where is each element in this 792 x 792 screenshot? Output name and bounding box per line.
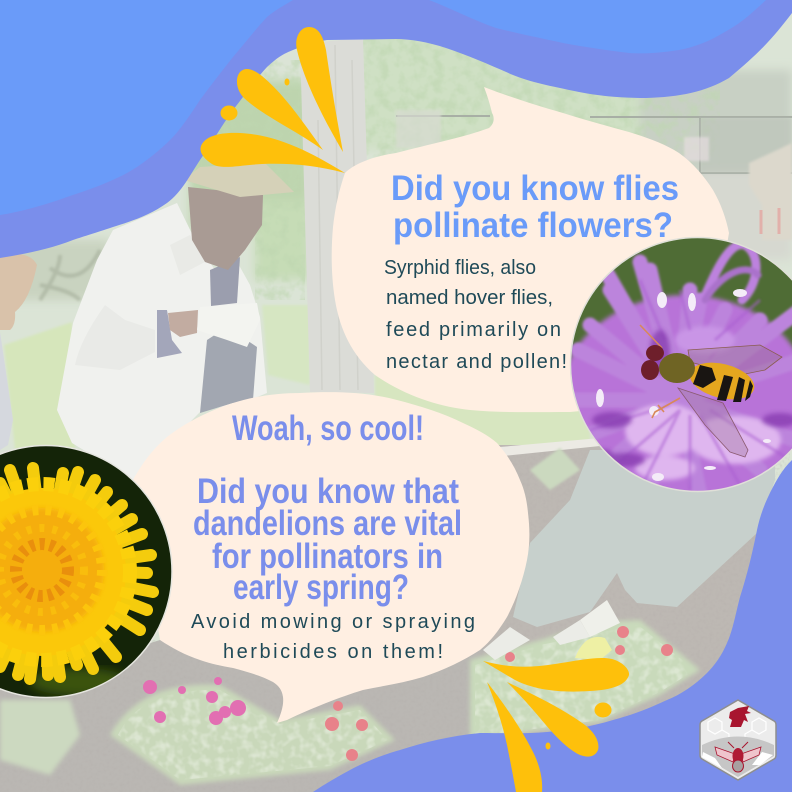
soil bed xyxy=(0,640,792,792)
photo circle: dandelion xyxy=(0,445,175,701)
body text: flies: feed primarily on xyxy=(386,319,561,341)
planting right xyxy=(470,620,700,740)
lattice xyxy=(396,110,441,148)
planting right texture xyxy=(475,625,695,737)
pink flowers xyxy=(143,677,246,725)
leaf texture xyxy=(190,30,720,300)
body text: dandelions: herbicides on them! xyxy=(223,641,443,663)
purple petals xyxy=(575,244,792,495)
heading: dandelions: dandelions are vital xyxy=(193,504,462,543)
wings xyxy=(688,345,782,375)
top light blue wave group xyxy=(0,0,792,258)
wooden post xyxy=(300,38,374,393)
thorax xyxy=(659,353,695,383)
red flowers xyxy=(325,626,673,761)
grass left xyxy=(4,322,75,450)
birdhouse xyxy=(749,143,792,240)
heading: dandelions: for pollinators in xyxy=(212,537,443,576)
inner golden petals xyxy=(0,488,126,656)
jacket xyxy=(57,203,267,480)
foliage behind fence xyxy=(0,30,792,300)
yellow splash top xyxy=(200,27,345,173)
honeycomb cells xyxy=(708,718,766,742)
body text: dandelions xyxy=(191,611,475,663)
dark periwinkle wave xyxy=(0,0,792,258)
planting left xyxy=(110,685,395,785)
body text: flies: named hover flies, xyxy=(386,287,553,309)
deep magenta shadows xyxy=(586,330,792,467)
dark fence panel xyxy=(700,118,792,173)
antenna and legs xyxy=(640,325,680,418)
heading: dandelions: early spring? xyxy=(233,568,409,607)
heading: flies: Did you know flies xyxy=(391,169,679,208)
abdomen stripes xyxy=(693,365,753,402)
face xyxy=(188,187,263,270)
body text: flies xyxy=(384,257,567,373)
bottom right blue wave xyxy=(313,460,792,792)
stone edging xyxy=(500,438,600,456)
pants xyxy=(513,450,775,627)
eyes xyxy=(641,345,664,380)
hat xyxy=(184,163,294,197)
grass middle xyxy=(262,305,310,385)
speech bubble: dandelions xyxy=(133,392,529,723)
yellow splash bottom xyxy=(483,658,629,792)
heading: flies xyxy=(391,169,679,245)
tree branches xyxy=(40,250,100,300)
bright flower centre xyxy=(625,326,781,480)
speech bubble: flies xyxy=(332,87,729,412)
shoe xyxy=(483,620,590,660)
lawn right xyxy=(375,375,590,450)
outer yellow petals xyxy=(0,468,153,679)
dark bag held xyxy=(200,327,257,413)
small plant on bed xyxy=(530,448,580,490)
floret rings xyxy=(0,484,130,660)
heading: dandelions xyxy=(193,409,462,607)
abdomen xyxy=(690,362,754,400)
body text: flies: Syrphid flies, also xyxy=(384,257,536,279)
yellow flowers xyxy=(575,637,612,660)
heading: dandelions: Did you know that xyxy=(197,472,459,511)
pale patch xyxy=(684,137,709,161)
globe band xyxy=(702,736,774,777)
photo circle: hover fly on purple flower xyxy=(560,237,792,505)
fence rail xyxy=(396,116,792,175)
planting left texture xyxy=(118,690,388,780)
light blue wave xyxy=(0,0,766,215)
petal streaks over centre xyxy=(590,280,790,490)
body text: dandelions: Avoid mowing or spraying xyxy=(191,611,475,633)
logo badge: WSU bee xyxy=(700,700,776,780)
glove xyxy=(197,303,260,347)
heading: flies: pollinate flowers? xyxy=(393,206,673,245)
cuff xyxy=(157,310,182,358)
second person at left edge xyxy=(0,254,37,330)
white map patches xyxy=(702,752,773,777)
heading: dandelions: Woah, so cool! xyxy=(232,409,424,448)
dark shirt xyxy=(210,257,240,306)
bee xyxy=(715,742,761,772)
sock and ankle xyxy=(580,600,620,637)
planting far left xyxy=(0,700,80,775)
cougar head xyxy=(729,706,751,727)
white anthers xyxy=(596,289,771,481)
sleeve fold xyxy=(75,305,155,370)
arm xyxy=(168,310,198,337)
body text: flies: nectar and pollen! xyxy=(386,351,567,373)
